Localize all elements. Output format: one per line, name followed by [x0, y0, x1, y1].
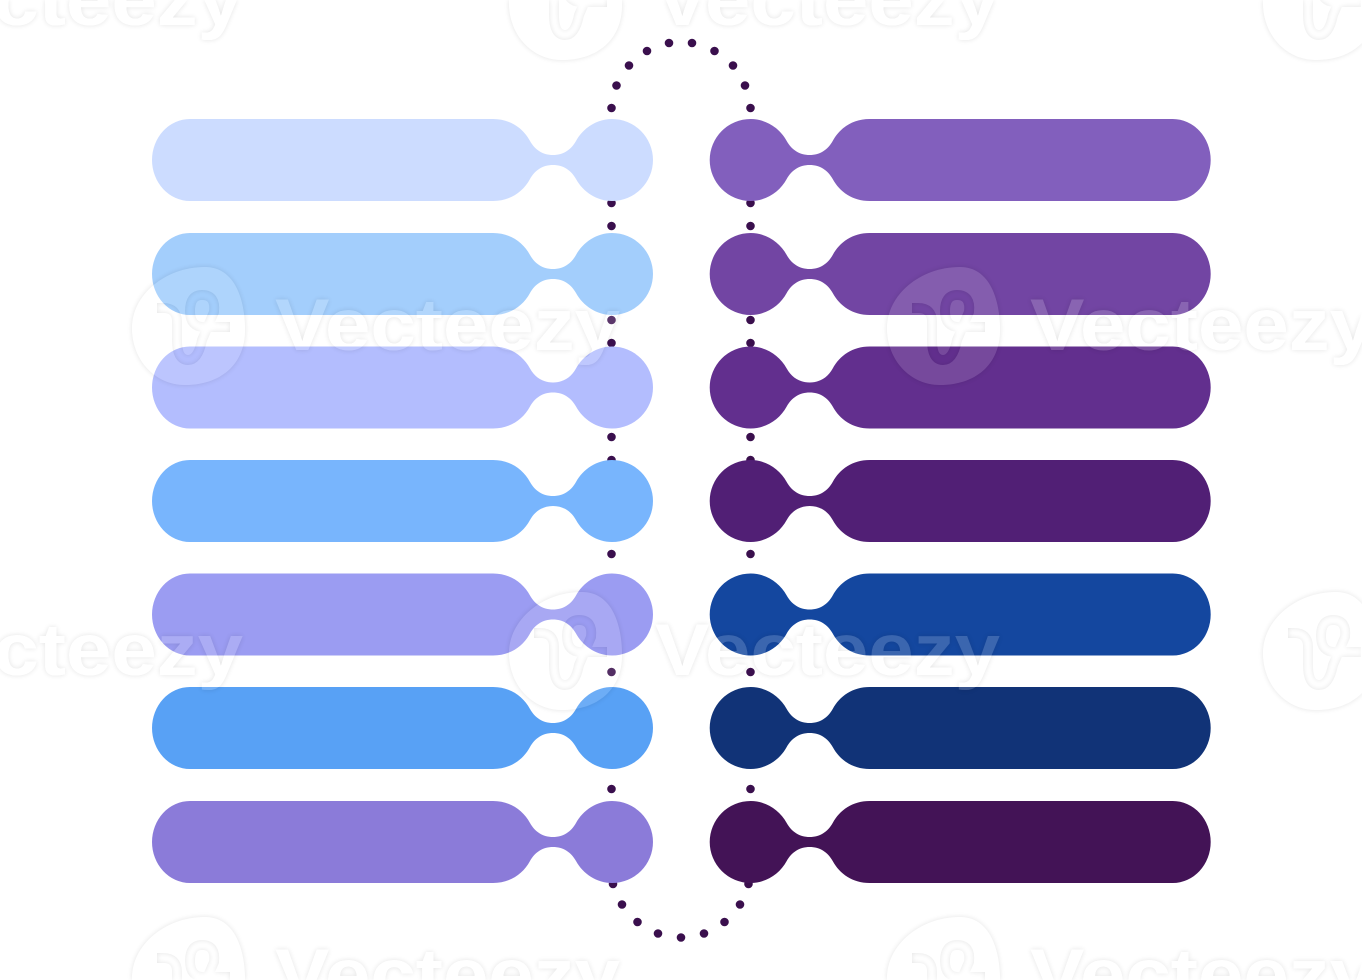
- watermark overlay: Vecteezy: [1030, 285, 1362, 366]
- left bar 7: [152, 801, 653, 883]
- right bar 1: [710, 119, 1211, 201]
- dotted oval path: [607, 39, 755, 942]
- right bar 4: [710, 460, 1211, 542]
- left bar 4: [152, 460, 653, 542]
- left bar 6: [152, 687, 653, 769]
- left bar 5: [152, 574, 653, 656]
- right bar 6: [710, 687, 1211, 769]
- right bar 7: [710, 801, 1211, 883]
- left bar 1: [152, 119, 653, 201]
- right bar 2: [710, 233, 1211, 315]
- right column of bars: [710, 119, 1211, 883]
- left bar 3: [152, 346, 653, 428]
- left column of bars: [152, 119, 653, 883]
- right bar 3: [710, 346, 1211, 428]
- right bar 5: [710, 574, 1211, 656]
- watermark overlay: Vecteezy: [275, 285, 620, 366]
- watermark overlay: Vecteezy: [655, 610, 1000, 691]
- left bar 2: [152, 233, 653, 315]
